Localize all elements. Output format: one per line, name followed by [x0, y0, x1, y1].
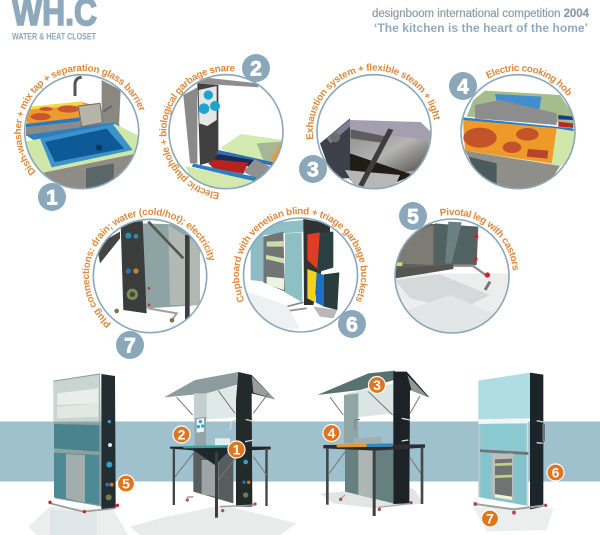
panel: detail 7 plug connections: [82, 208, 214, 359]
badge 3: 3: [307, 158, 319, 182]
detail image 5: [395, 219, 510, 335]
cabinet D: [473, 373, 547, 515]
badge 7: 7: [124, 334, 136, 358]
floor reflection D: [473, 507, 553, 532]
badge: orange 2: [173, 426, 190, 443]
caption 6: Cupboard with venetian blind + triage garbage buckets: [232, 207, 368, 302]
caption 5: Pivotal leg with castors: [440, 208, 518, 270]
logo: WH.C: WATER & HEAT CLOSET: [12, 32, 96, 42]
badge 3: [299, 155, 327, 183]
floor reflection B: [130, 505, 297, 535]
ring 3: [317, 75, 431, 189]
badge 4: 4: [457, 76, 469, 98]
badge 1: 1: [46, 186, 58, 210]
ring 4: [461, 75, 575, 189]
detail image 4: [462, 90, 574, 188]
badge: orange 7: 7: [486, 510, 494, 526]
caption 1: Dish-washer + mix tap + separation glass barrier: [14, 64, 144, 176]
badge 6: 6: [346, 314, 358, 336]
badge: orange 4: [323, 424, 340, 441]
badge: orange 1: [228, 441, 245, 458]
unit C: open kitchen with badges 3 and 4: [317, 371, 429, 516]
badge 2: [242, 54, 270, 82]
badge 7: [116, 331, 144, 359]
badge: orange 7: [481, 510, 498, 527]
floor reflection C: [320, 488, 423, 508]
caption 4: Electric cooking hob: [486, 64, 571, 96]
ring 2: [169, 75, 283, 189]
ring 7: [93, 219, 207, 333]
ring 5: [395, 219, 509, 333]
panel: detail 5 pivotal leg: [394, 202, 518, 334]
badge: orange 3: [368, 376, 385, 393]
unit A: closed cabinet with badge 5: [28, 373, 134, 535]
header: competition text: [372, 8, 590, 35]
detail image 6: [247, 219, 340, 329]
caption 7: Plug connections: drain; water (cold/hot); electricity: [82, 208, 214, 328]
background band: [0, 422, 600, 482]
caption 2: Electric plughole + biological garbage snare: [159, 66, 235, 200]
detail image 7: [98, 220, 200, 323]
kitchen unit B: [164, 372, 275, 518]
panel: detail 1 sink: [14, 64, 144, 211]
kitchen unit C: [317, 371, 429, 516]
ring 1: [25, 75, 139, 189]
badge: orange 5: 5: [122, 475, 130, 491]
badge: orange 6: 6: [552, 464, 560, 480]
badge: orange 1: 1: [233, 441, 241, 457]
badge: orange 6: [547, 464, 564, 481]
badge: orange 3: 3: [373, 377, 381, 393]
cabinet A: [48, 373, 119, 513]
header: competition text: ‘The kitchen is the heart of the home’: [374, 21, 588, 35]
ring 6: [244, 218, 358, 332]
floor reflection A: [28, 507, 128, 535]
unit D: closed cabinet rear with badges 6 and 7: [473, 373, 564, 532]
panel: detail 6 cupboard: [232, 207, 368, 338]
detail image 3: [320, 118, 430, 188]
panel: detail 4 cooking hob: [449, 64, 576, 190]
unit B: open kitchen with badges 1 and 2: [130, 372, 297, 535]
header: competition text: designboom international competition 2004: [372, 8, 590, 20]
badge 1: [38, 183, 66, 211]
panel: detail 3 exhaustion: [299, 64, 440, 190]
detail image 1: [26, 76, 138, 188]
badge: orange 5: [117, 475, 134, 492]
badge 2: 2: [250, 58, 262, 80]
badge: orange 4: 4: [328, 425, 336, 441]
panel: detail 2 plughole: [159, 54, 284, 200]
badge: orange 2: 2: [178, 426, 186, 442]
detail image 2: [183, 78, 282, 188]
badge 5: 5: [407, 206, 419, 228]
caption 3: Exhaustion system + flexible steam + light: [306, 64, 440, 140]
